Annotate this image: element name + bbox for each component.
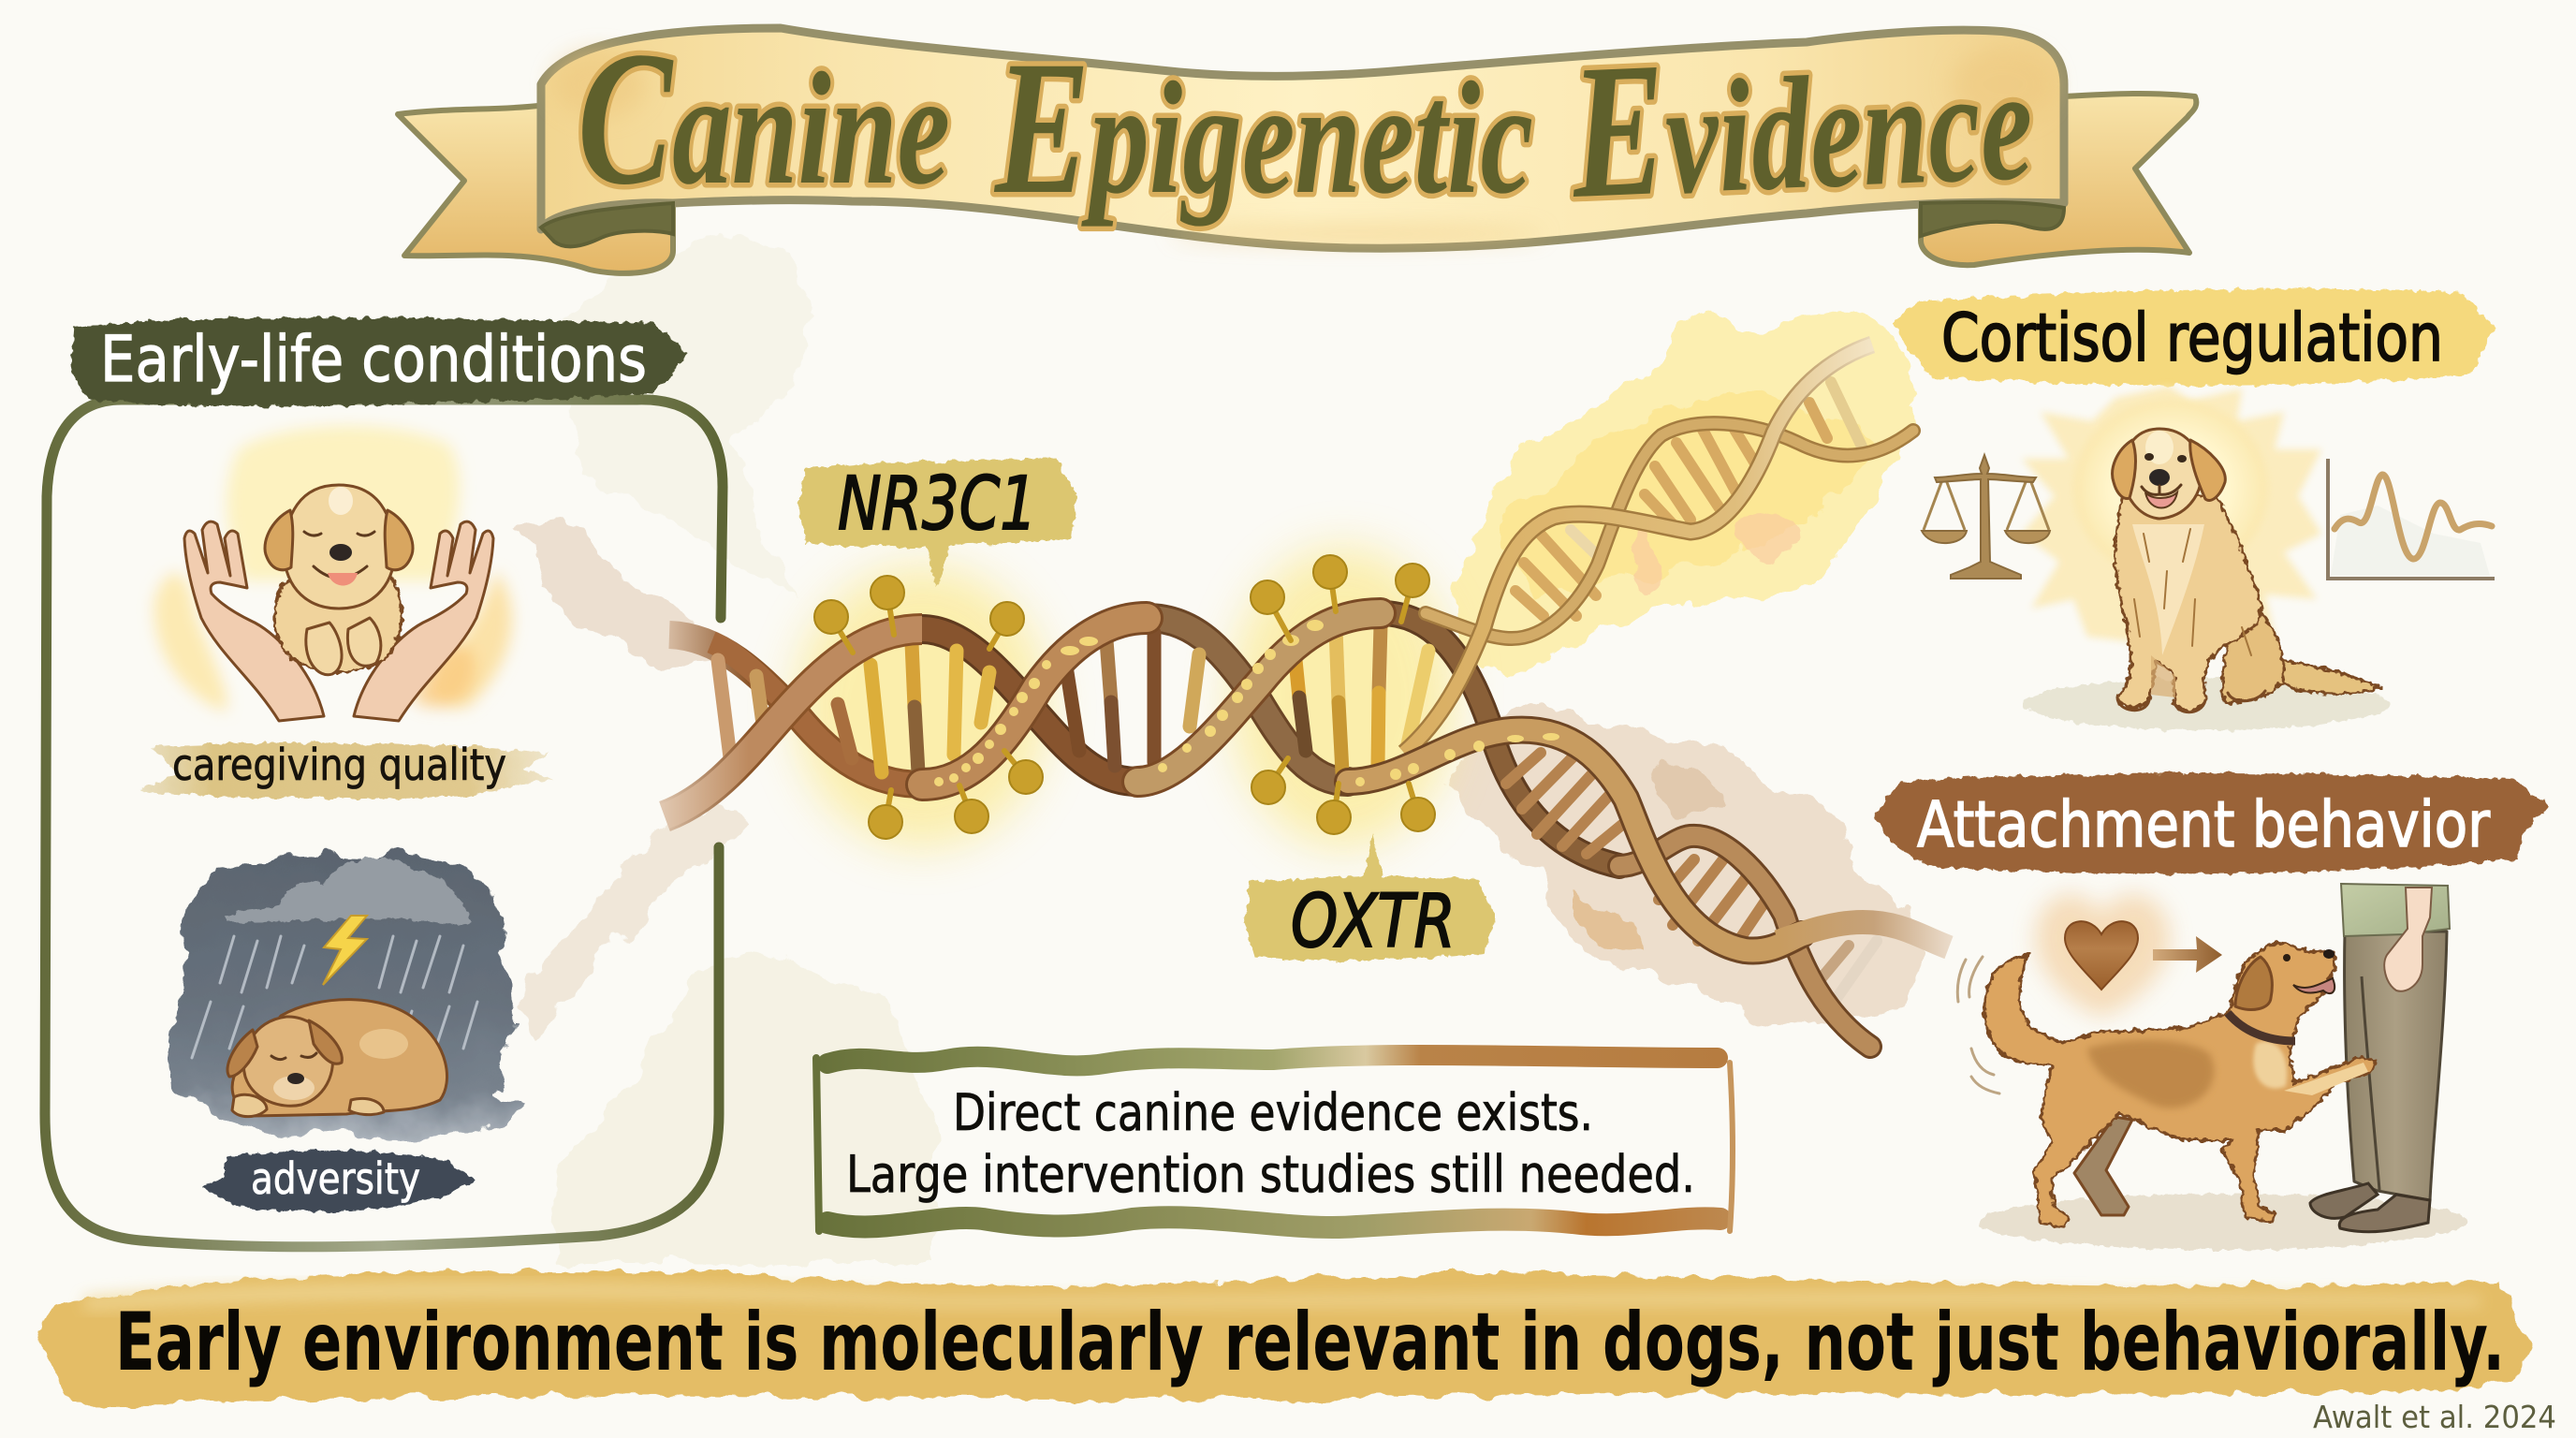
icon: puppy in a storm bbox=[168, 853, 529, 1136]
dog shadow bbox=[2024, 678, 2389, 730]
yellow wash behind upper helix bbox=[1452, 308, 1917, 676]
chest fur bbox=[2132, 524, 2204, 655]
callout text line 2: Large intervention studies still needed. bbox=[846, 1145, 1695, 1204]
banner watercolor patches bbox=[552, 47, 2055, 242]
title text: Evidence bbox=[1566, 7, 2036, 239]
tail bbox=[2280, 660, 2379, 694]
scale strings bbox=[1924, 477, 2049, 530]
label strip: adversity bbox=[201, 1151, 476, 1211]
ears bbox=[2113, 440, 2135, 498]
chart axes bbox=[2328, 459, 2495, 579]
mouth and tongue bbox=[2293, 978, 2334, 993]
puppy head bbox=[243, 1017, 332, 1106]
puppy blaze bbox=[329, 487, 353, 515]
nose bbox=[2323, 949, 2334, 959]
title text bbox=[578, 7, 2036, 239]
arrow bbox=[2153, 936, 2222, 973]
upper helix strands bbox=[1426, 423, 1913, 638]
icon: heart with glow bbox=[2036, 894, 2170, 1017]
hand left bbox=[184, 521, 324, 721]
heading strip bbox=[1874, 773, 2551, 873]
methyl groups: OXTR site bbox=[1251, 555, 1435, 834]
banner right tail bbox=[1921, 94, 2196, 265]
heart bbox=[2065, 921, 2138, 990]
icon: dog looking up at owner bbox=[1984, 943, 2376, 1226]
body shading bbox=[2087, 1040, 2214, 1108]
takeaway strip bbox=[34, 1270, 2535, 1405]
storm wash bbox=[168, 853, 529, 1136]
person bbox=[2310, 884, 2450, 1232]
warm glow bbox=[154, 426, 512, 712]
far back leg bbox=[2074, 1117, 2132, 1215]
heading: Attachment behavior bbox=[1917, 788, 2490, 862]
head bbox=[2123, 429, 2202, 519]
head blaze bbox=[2145, 431, 2174, 464]
heading: Cortisol regulation bbox=[1941, 300, 2443, 376]
leg shading bbox=[2151, 655, 2175, 697]
citation: Awalt et al. 2024 bbox=[2313, 1399, 2556, 1435]
outcome: attachment behavior bbox=[1874, 773, 2551, 1250]
label text: NR3C1 bbox=[838, 462, 1037, 547]
puppy head bbox=[284, 485, 395, 609]
body bbox=[2115, 496, 2261, 711]
scale column and beam bbox=[1935, 455, 2036, 579]
title banner bbox=[398, 7, 2196, 273]
eye bbox=[2283, 954, 2291, 961]
methyl glow bbox=[796, 548, 1456, 847]
brown wash behind lower helix bbox=[1447, 704, 1920, 1023]
puppy ears bbox=[227, 1030, 257, 1077]
ground shadow bbox=[1980, 1194, 2466, 1250]
trouser centre line bbox=[2362, 976, 2379, 1190]
collar bbox=[2228, 1013, 2295, 1041]
dog body bbox=[1984, 943, 2376, 1226]
label: caregiving quality: caregiving quality bbox=[172, 740, 506, 790]
puppy body bbox=[274, 576, 402, 672]
icon: balance scale bbox=[1922, 455, 2050, 579]
heart glow bbox=[2036, 894, 2170, 1017]
panel heading strip bbox=[70, 317, 688, 406]
sun halo core bbox=[2073, 399, 2268, 579]
background water stains bbox=[552, 241, 936, 1264]
label strip: caregiving quality bbox=[139, 742, 554, 799]
lightning bolt bbox=[323, 916, 367, 985]
fur lines bbox=[2134, 529, 2251, 655]
DNA helix bbox=[665, 345, 1949, 1047]
rain bbox=[192, 936, 477, 1058]
chart curve bbox=[2334, 475, 2492, 559]
icon: calm sitting golden retriever bbox=[2113, 429, 2379, 712]
callout: evidence status bbox=[816, 1055, 1733, 1231]
trousers bbox=[2345, 932, 2447, 1200]
takeaway top tint bbox=[84, 1283, 2481, 1311]
panel heading: Early-life conditions bbox=[100, 323, 647, 397]
methyl groups: NR3C1 site bbox=[814, 576, 1043, 839]
lower helix rungs bbox=[1506, 753, 1877, 1006]
main helix front strands bbox=[665, 629, 922, 816]
heading strip bbox=[1893, 289, 2495, 386]
puppy highlight bbox=[359, 1029, 408, 1059]
puppy paws bbox=[232, 1094, 384, 1117]
callout text line 1: Direct canine evidence exists. bbox=[953, 1083, 1593, 1142]
takeaway banner bbox=[34, 1270, 2535, 1405]
leg highlight bbox=[2284, 1063, 2368, 1095]
puppy ears bbox=[265, 510, 293, 570]
shirt bbox=[2341, 884, 2450, 936]
icon: cortisol curve chart bbox=[2328, 459, 2495, 579]
label tag bbox=[798, 457, 1076, 588]
title text: Epigenetic bbox=[994, 22, 1533, 234]
puppy face bbox=[273, 1076, 315, 1100]
tail wag motion lines bbox=[1957, 957, 1999, 1093]
callout frame bbox=[816, 1055, 1733, 1231]
lower helix strand X bbox=[1619, 836, 1870, 1047]
icon: puppy held in caring hands bbox=[154, 426, 512, 721]
upper helix rungs bbox=[1515, 382, 1863, 616]
cloud bbox=[225, 858, 471, 925]
chest highlight bbox=[2253, 1041, 2287, 1089]
chart wash bbox=[2331, 506, 2490, 576]
banner left fold bbox=[541, 203, 673, 246]
sun halo rays bbox=[2022, 386, 2321, 646]
banner main ribbon bbox=[541, 28, 2064, 248]
arm and hand bbox=[2384, 888, 2432, 991]
stains at DNA strand ends bbox=[515, 519, 749, 1039]
banner right fold bbox=[1921, 202, 2064, 236]
gene label: NR3C1 bbox=[798, 457, 1076, 588]
title text: Canine bbox=[578, 12, 950, 225]
methylation dots on strands bbox=[934, 620, 1559, 786]
scale pans bbox=[1922, 531, 2050, 543]
label text: OXTR bbox=[1291, 880, 1456, 964]
shoes bbox=[2310, 1183, 2378, 1218]
face bbox=[2144, 453, 2154, 461]
puppy face bbox=[329, 544, 352, 561]
back strands bbox=[669, 613, 1619, 866]
banner left tail bbox=[398, 106, 673, 273]
curled puppy bbox=[232, 1000, 447, 1116]
panel: early-life conditions bbox=[45, 317, 723, 1247]
paws bbox=[2117, 691, 2265, 712]
ear bbox=[2235, 957, 2272, 1009]
gene label: OXTR bbox=[1245, 833, 1496, 964]
label: adversity: adversity bbox=[251, 1153, 420, 1204]
puppy paws bbox=[306, 623, 342, 675]
outcome: cortisol regulation bbox=[1893, 289, 2495, 730]
label tag bbox=[1245, 833, 1496, 961]
base-pair rungs bbox=[718, 625, 1428, 780]
hand right bbox=[354, 521, 493, 721]
panel border bbox=[45, 400, 723, 1247]
haunch bbox=[2222, 609, 2284, 702]
